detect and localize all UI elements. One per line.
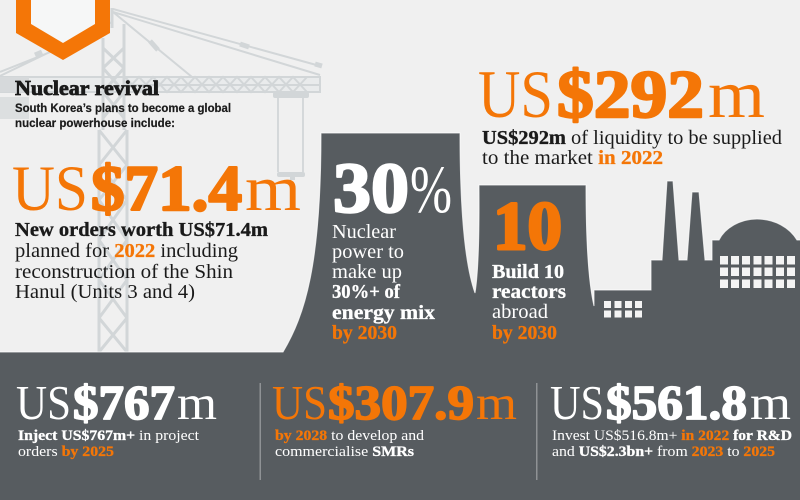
text: liquidity: US$292m of liquidity to be supplied — [482, 127, 782, 149]
stat: US$71.4m: m — [245, 153, 301, 225]
panel: US$307.9m: $307.9 — [328, 375, 474, 430]
text: nuclear power share: energy mix — [332, 303, 435, 324]
panel: US$561.8m: and US$2.3bn+ from 2023 to 2025 — [552, 444, 775, 460]
text: build reactors: reactors — [492, 282, 566, 303]
stat: 30% — [333, 150, 452, 228]
panel: US$767m: US — [16, 375, 71, 430]
text: nuclear power share: 30%+ of — [332, 282, 400, 303]
icon: orange hexagon — [16, 0, 110, 60]
text: nuclear power share: make up — [332, 262, 402, 283]
icon: factory small windows — [604, 301, 642, 318]
panel: US$307.9m: by 2028 to develop and — [275, 428, 425, 444]
stat: 30%: % — [410, 151, 452, 227]
silhouette: cooling towers and factory — [0, 133, 800, 500]
stat: US$292m — [478, 56, 765, 132]
stat: US$292m: US — [478, 56, 553, 132]
panel: US$307.9m: US — [272, 375, 327, 430]
stat: US$71.4m: US — [12, 153, 88, 225]
title: South Korea’s plans to become a global — [15, 103, 231, 115]
text: new orders: New orders worth US$71.4m — [15, 219, 268, 241]
panel: US$307.9m: commercialise SMRs — [275, 444, 414, 460]
stat: US$71.4m: $71.4 — [91, 153, 242, 225]
text: build reactors: by 2030 — [492, 323, 557, 344]
text: nuclear power share: Nuclear — [332, 222, 397, 243]
panel: US$767m: orders by 2025 — [18, 444, 114, 460]
text: new orders — [15, 219, 268, 303]
stat: 10: 10 — [493, 188, 562, 264]
stat: US$292m: $292 — [557, 56, 704, 132]
stat: US$292m: m — [708, 56, 765, 132]
panel: US$561.8m: US — [550, 375, 604, 430]
stat: US$71.4m — [12, 153, 301, 225]
panel: US$561.8m — [550, 375, 792, 460]
text: nuclear power share: power to — [332, 242, 404, 263]
stat: 30%: 30 — [333, 150, 409, 228]
panel: US$767m — [16, 375, 217, 460]
text: new orders: planned for 2022 including — [15, 240, 238, 262]
text: liquidity — [482, 127, 782, 169]
title: nuclear powerhouse include: — [15, 118, 175, 130]
icon: dome building windows — [720, 256, 795, 288]
panel: US$307.9m — [272, 375, 517, 460]
text: build reactors: abroad — [492, 302, 548, 323]
title: Nuclear revival — [15, 76, 159, 100]
text: build reactors: Build 10 — [492, 262, 564, 283]
text: nuclear power share — [332, 222, 435, 344]
icon: crane — [0, 8, 322, 352]
panel: US$767m: $767 — [73, 375, 175, 430]
divider — [260, 383, 261, 480]
panel: US$561.8m: Invest US$516.8m+ in 2022 for R&D — [552, 428, 792, 444]
panel: US$307.9m: m — [476, 375, 517, 430]
divider — [536, 383, 538, 480]
panel: US$561.8m: $561.8 — [606, 375, 747, 430]
title — [15, 76, 231, 130]
text: liquidity: to the market in 2022 — [482, 147, 663, 169]
panel: US$767m: Inject US$767m+ in project — [18, 428, 199, 444]
text: build reactors — [492, 262, 566, 344]
panel: US$561.8m: m — [750, 375, 791, 430]
text: new orders: reconstruction of the Shin — [15, 261, 233, 283]
panel: US$767m: m — [177, 375, 217, 430]
text: nuclear power share: by 2030 — [332, 323, 397, 344]
text: new orders: Hanul (Units 3 and 4) — [15, 281, 195, 303]
